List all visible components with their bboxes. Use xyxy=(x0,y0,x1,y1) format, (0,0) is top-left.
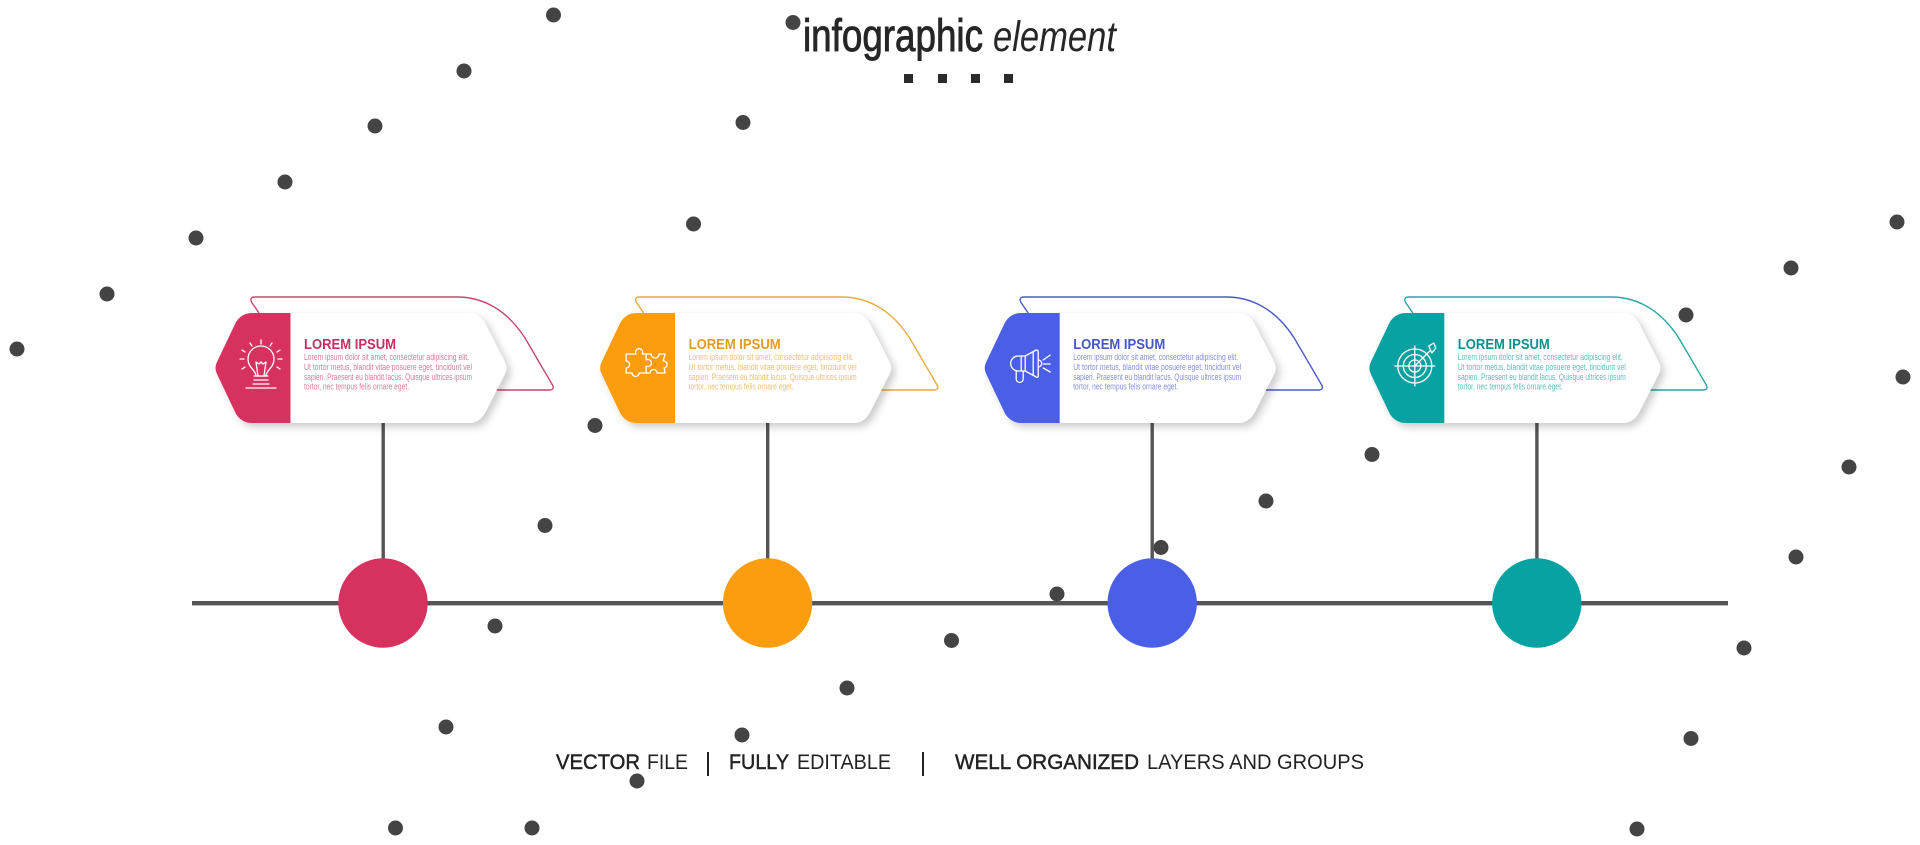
body text xyxy=(1073,352,1241,392)
footer caption: FILE xyxy=(647,751,688,774)
body text xyxy=(689,352,857,392)
body text: Lorem ipsum dolor sit amet, consectetur adipiscing elit. xyxy=(689,352,854,362)
body text: tortor, nec tempus felis ornare eget. xyxy=(1073,382,1178,392)
card body xyxy=(600,313,891,423)
card outline: orange xyxy=(636,297,938,390)
panel: step 4 xyxy=(1369,297,1707,423)
title xyxy=(803,10,1118,61)
body text: tortor, nec tempus felis ornare eget. xyxy=(304,382,409,392)
footer caption: LAYERS AND GROUPS xyxy=(1147,751,1364,774)
card body xyxy=(1369,313,1660,423)
body text: Lorem ipsum dolor sit amet, consectetur adipiscing elit. xyxy=(304,352,469,362)
body text: Ut tortor metus, blandit vitae posuere eget, tincidunt vel xyxy=(689,362,857,372)
footer caption: EDITABLE xyxy=(797,751,891,774)
body text: sapien. Praesent eu blandit lacus. Quisque ultrices ipsum xyxy=(1458,372,1626,382)
icon: target xyxy=(1395,343,1436,386)
colour tab xyxy=(1369,313,1444,423)
card outline: teal xyxy=(1405,297,1707,390)
heading: LOREM IPSUM xyxy=(304,337,396,353)
heading: LOREM IPSUM xyxy=(689,337,781,353)
body text: Lorem ipsum dolor sit amet, consectetur adipiscing elit. xyxy=(1073,352,1238,362)
body text xyxy=(1458,352,1626,392)
icon: megaphone xyxy=(1011,350,1050,382)
panel: step 3 xyxy=(985,297,1322,423)
footer caption: VECTOR xyxy=(556,751,640,774)
icon: light bulb xyxy=(240,340,282,388)
title: element xyxy=(993,13,1118,61)
heading: LOREM IPSUM xyxy=(1458,337,1550,353)
body text: sapien. Praesent eu blandit lacus. Quisque ultrices ipsum xyxy=(1073,372,1241,382)
card outline: blue xyxy=(1020,297,1322,390)
body text: tortor, nec tempus felis ornare eget. xyxy=(1458,382,1563,392)
colour tab xyxy=(600,313,675,423)
footer caption xyxy=(556,751,1364,776)
timeline node: teal xyxy=(1492,558,1582,648)
body text: tortor, nec tempus felis ornare eget. xyxy=(689,382,794,392)
card body xyxy=(985,313,1276,423)
timeline node: pink xyxy=(338,558,428,648)
icon: puzzle xyxy=(626,349,667,376)
heading: LOREM IPSUM xyxy=(1073,337,1165,353)
timeline node: orange xyxy=(723,558,812,648)
connector stems xyxy=(382,420,1539,565)
body text: Ut tortor metus, blandit vitae posuere eget, tincidunt vel xyxy=(1073,362,1241,372)
body text: Ut tortor metus, blandit vitae posuere eget, tincidunt vel xyxy=(1458,362,1626,372)
panel: step 2 xyxy=(600,297,938,423)
body text: sapien. Praesent eu blandit lacus. Quisque ultrices ipsum xyxy=(689,372,857,382)
footer caption: FULLY xyxy=(729,751,789,774)
footer caption: WELL ORGANIZED xyxy=(955,751,1139,774)
colour tab xyxy=(216,313,290,423)
title: infographic xyxy=(803,10,983,61)
colour tab xyxy=(985,313,1060,423)
body text xyxy=(304,352,472,392)
card body xyxy=(216,313,506,423)
timeline axis xyxy=(192,601,1728,605)
body text: Lorem ipsum dolor sit amet, consectetur adipiscing elit. xyxy=(1458,352,1623,362)
body text: Ut tortor metus, blandit vitae posuere eget, tincidunt vel xyxy=(304,362,472,372)
card outline: pink xyxy=(251,297,553,390)
body text: sapien. Praesent eu blandit lacus. Quisque ultrices ipsum xyxy=(304,372,472,382)
timeline node: blue xyxy=(1108,558,1197,648)
title square markers xyxy=(904,74,1013,83)
panel: step 1 xyxy=(216,297,553,423)
